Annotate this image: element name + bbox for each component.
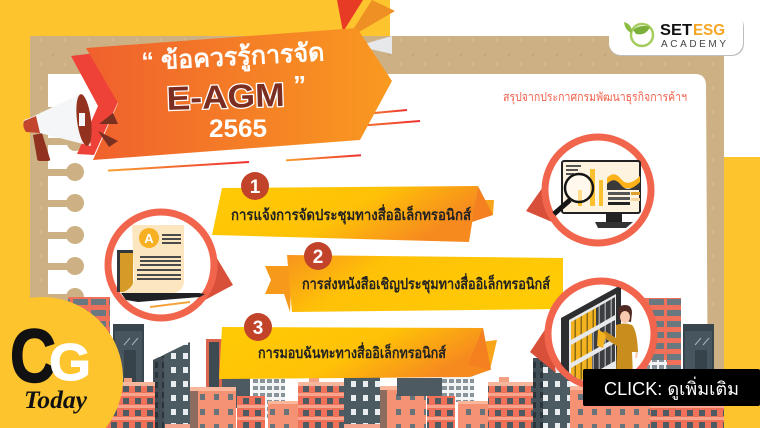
white notebook page xyxy=(48,74,708,428)
closing quote: ” xyxy=(293,70,306,100)
right red block xyxy=(650,390,724,428)
grey tower right xyxy=(533,358,570,428)
number badge 1 xyxy=(241,172,269,200)
item 1 ribbon xyxy=(212,172,494,242)
item 3 ribbon xyxy=(219,313,497,379)
logo academy: ACADEMY xyxy=(661,39,726,50)
subtitle source note: สรุปจากประกาศกรมพัฒนาธุรกิจการค้าฯ xyxy=(503,90,687,105)
city skyline xyxy=(68,297,724,428)
number badge 3 xyxy=(244,313,272,341)
title year: 2565 xyxy=(209,115,267,143)
small peach block xyxy=(268,401,299,428)
small red block centre xyxy=(427,396,455,428)
left red tower xyxy=(68,297,110,428)
woman figure xyxy=(597,305,638,379)
right red tower xyxy=(645,298,681,378)
CLICK button xyxy=(583,369,760,406)
white office block xyxy=(252,378,285,418)
red block right-centre xyxy=(488,377,534,428)
logo mark xyxy=(624,22,653,46)
item 1 label: การแจ้งการจัดประชุมทางสื่ออิเล็กทรอนิกส์ xyxy=(231,204,472,225)
item 3 label: การมอบฉันทะทางสื่ออิเล็กทรอนิกส์ xyxy=(258,342,447,362)
item 2 label: การส่งหนังสือเชิญประชุมทางสื่ออิเล็กทรอนิกส์ xyxy=(302,273,551,294)
number badge 2: 2 xyxy=(313,247,323,268)
right peach block xyxy=(570,386,650,428)
logo: SET ESG Academy xyxy=(609,13,744,56)
title line 1: “ ข้อควรรู้การจัด xyxy=(141,38,325,78)
number badge 2 xyxy=(304,242,332,270)
small peach block centre xyxy=(458,401,489,428)
right white block xyxy=(647,360,667,380)
icon bubble: document on laptop: A xyxy=(144,231,154,246)
Today script: Today xyxy=(24,387,88,414)
logo: SET ESG Academy: ESG xyxy=(693,22,725,39)
CLICK button: CLICK: ดูเพิ่มเติม xyxy=(604,376,739,400)
icon bubble: document on laptop xyxy=(108,212,233,318)
logo wordmark: SET xyxy=(660,22,692,39)
red block centre xyxy=(298,378,344,428)
notebook binder tabs xyxy=(48,102,84,306)
icon bubble: document shelf with woman xyxy=(530,281,654,404)
small red block xyxy=(237,396,265,428)
icon: megaphone xyxy=(23,93,118,161)
item 2 ribbon xyxy=(265,242,563,312)
number badge 1: 1 xyxy=(250,177,261,198)
maroon back tower xyxy=(206,339,250,408)
number badge 3: 3 xyxy=(253,318,263,339)
decorative accent triangles xyxy=(337,0,395,54)
streak lines xyxy=(108,110,420,171)
CG Today badge xyxy=(0,297,123,428)
title E-AGM: E-AGM xyxy=(166,76,285,117)
peach block xyxy=(190,387,236,428)
CG Today badge: G xyxy=(49,334,91,392)
banner front xyxy=(86,28,392,160)
slanted grey tower xyxy=(153,342,195,428)
peach block centre xyxy=(380,386,426,428)
CG letters: C xyxy=(10,314,56,398)
title banner xyxy=(71,28,392,160)
red block left xyxy=(108,378,155,428)
shelf screen with folders xyxy=(561,287,621,381)
banner back ribbon xyxy=(71,53,118,155)
background: yellow right block xyxy=(700,157,760,428)
right glass tower xyxy=(683,324,714,386)
icon bubble: monitor with magnifier xyxy=(526,137,651,243)
grey centre tower xyxy=(344,372,384,428)
back towers centre xyxy=(397,370,474,402)
left glass tower xyxy=(113,324,144,394)
background: yellow top-left block xyxy=(0,0,390,428)
